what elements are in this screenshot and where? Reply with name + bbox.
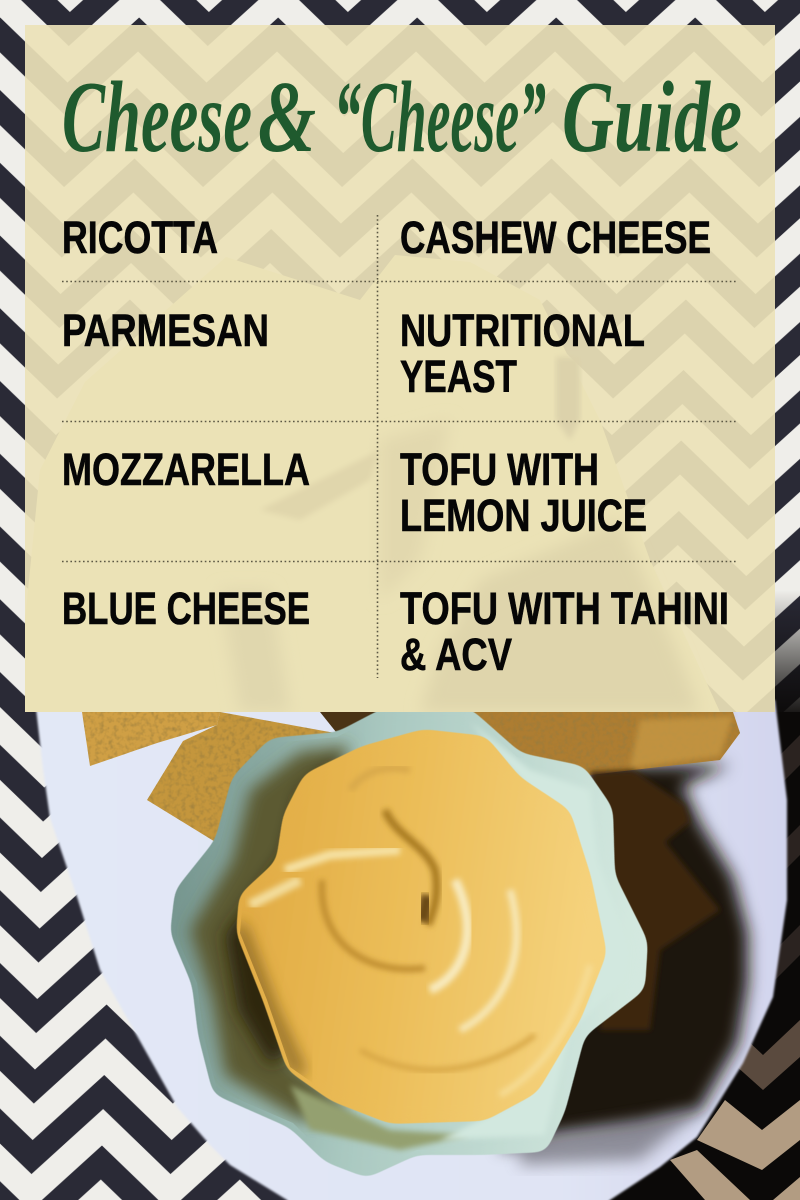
photo: tortilla chips [82, 712, 740, 1030]
photo: creamy cheese dip [236, 729, 607, 1124]
panel: translucent cream guide panel [25, 25, 775, 712]
row 3: mozzarella and tofu with lemon juice: TOFU WITH [400, 444, 599, 495]
row 2: parmesan and nutritional yeast: PARMESAN [62, 305, 269, 356]
title: & [258, 61, 316, 174]
row 2: parmesan and nutritional yeast: YEAST [400, 351, 517, 402]
title: “Cheese” [334, 61, 546, 174]
row 2: parmesan and nutritional yeast [62, 305, 645, 402]
row 2: parmesan and nutritional yeast: NUTRITIONAL [400, 305, 645, 356]
photo: white plate [35, 700, 787, 1200]
row 1: ricotta and cashew cheese: CASHEW CHEESE [400, 212, 711, 263]
row 1: ricotta and cashew cheese: RICOTTA [62, 212, 218, 263]
title [62, 61, 742, 174]
photo: ceramic bowl [170, 708, 648, 1178]
row 4: blue cheese and tofu with tahini and acv: & ACV [400, 629, 512, 680]
row 3: mozzarella and tofu with lemon juice: LEMON JUICE [400, 490, 647, 541]
row 3: mozzarella and tofu with lemon juice [62, 444, 647, 541]
photo: shadow on plate [500, 765, 748, 1165]
row 3: mozzarella and tofu with lemon juice: MOZZARELLA [62, 444, 310, 495]
title: Cheese [62, 61, 252, 174]
row 4: blue cheese and tofu with tahini and acv [62, 583, 729, 680]
divider grid: dotted lines [62, 215, 738, 678]
row 4: blue cheese and tofu with tahini and acv: TOFU WITH TAHINI [400, 583, 729, 634]
row 4: blue cheese and tofu with tahini and acv: BLUE CHEESE [62, 583, 310, 634]
row 1: ricotta and cashew cheese [62, 212, 711, 263]
